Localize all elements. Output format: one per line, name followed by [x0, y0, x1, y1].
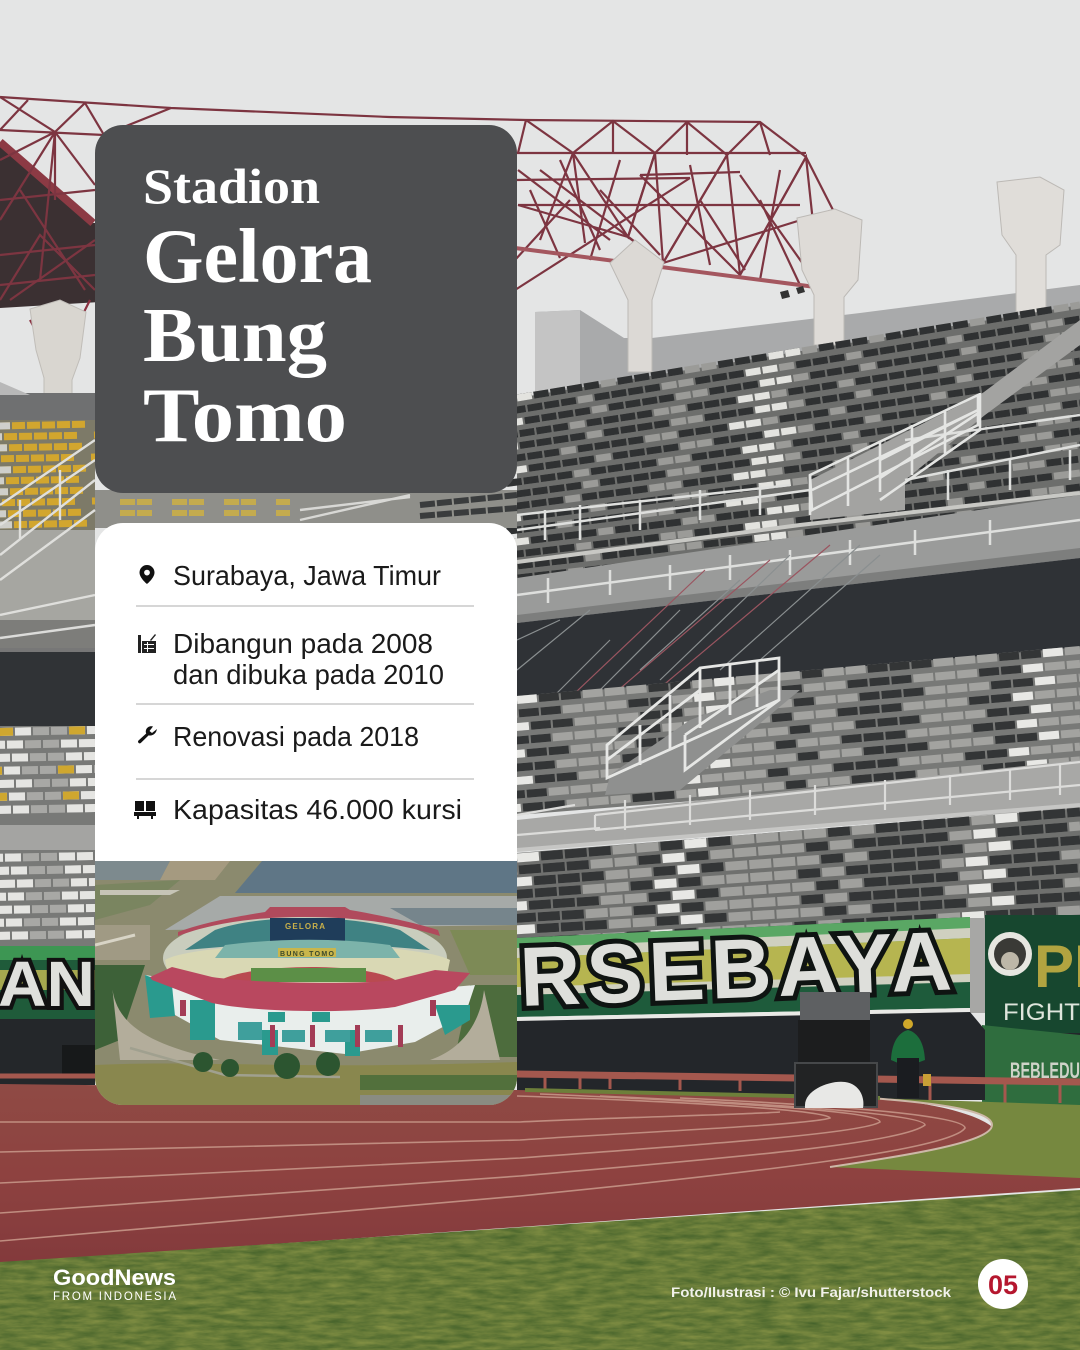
- worker figure: [891, 1019, 931, 1098]
- gap strip between panels: [95, 490, 517, 528]
- track: [0, 1084, 1080, 1263]
- track lanes: [0, 1094, 965, 1241]
- aerial: back roof: [178, 907, 440, 936]
- logo: GoodNews from Indonesia: GoodNews: [53, 1265, 176, 1290]
- banner: Persebaya left: AN: [0, 948, 95, 1020]
- aerial: red track and pitch: [218, 967, 398, 982]
- concourse deck: [517, 495, 1080, 623]
- fact: renovation: Renovasi pada 2018: [173, 721, 419, 752]
- dark wall below banners: [517, 1012, 985, 1100]
- icon: seats: [134, 801, 156, 819]
- aerial: front roof: [150, 967, 470, 1011]
- facts card: [95, 523, 517, 1105]
- speaker stack: [795, 992, 877, 1108]
- icon: wrench: [138, 726, 157, 743]
- aerial: stands: [163, 917, 447, 968]
- title: Gelora Bung Tomo: Gelora: [143, 213, 372, 299]
- roof truss: [0, 97, 833, 420]
- title: Gelora Bung Tomo: [143, 213, 372, 458]
- aerial: water ponds: [95, 861, 170, 880]
- banner: green fighter: [970, 915, 1080, 1105]
- banner: green fighter: FIGHT: [1003, 999, 1080, 1026]
- under-deck dark void: [517, 558, 1080, 700]
- lower stand seats: [483, 647, 1080, 815]
- upper stand seats: [473, 305, 1080, 600]
- fact: capacity: Kapasitas 46.000 kursi: [173, 794, 462, 825]
- third tier seats: [483, 808, 1080, 945]
- roof underside left: [0, 142, 100, 308]
- page number: 05: [988, 1270, 1018, 1300]
- logo: GoodNews from Indonesia: [53, 1265, 176, 1303]
- aerial: stadium name: GELORA: [285, 922, 325, 931]
- title: Gelora Bung Tomo: Tomo: [143, 372, 347, 458]
- left side: gray wall, yellow seats: [0, 393, 95, 420]
- right pillars: [610, 240, 664, 372]
- aerial photo of stadium: BUNG TOMO: [280, 951, 335, 958]
- field grass: [0, 1190, 1080, 1350]
- lower stair rails: [607, 658, 779, 778]
- left pillar: [30, 300, 86, 430]
- aerial: teal and white facade: [145, 975, 475, 1054]
- grass wedge: [830, 1098, 1080, 1178]
- lower aisle and stairs: [605, 690, 800, 795]
- title: Gelora Bung Tomo: Bung: [143, 292, 327, 378]
- fact: built: Dibangun pada 2008: [173, 628, 433, 659]
- photo credit: Foto/Ilustrasi : © Ivu Fajar/shutterstock: [671, 1284, 951, 1300]
- red barrier: [0, 1074, 1080, 1103]
- icon: location pin: [140, 565, 154, 584]
- fact: built: dan dibuka pada 2010: [173, 659, 444, 690]
- dividers: [136, 605, 474, 780]
- title: Stadion: Stadion: [143, 158, 320, 214]
- upper aisle stairs: [810, 320, 1080, 520]
- page number: [978, 1259, 1028, 1309]
- icon: blueprint: [138, 634, 156, 653]
- fact: built: [173, 628, 444, 690]
- back wall: [520, 285, 1080, 420]
- banner: Persebaya right: RSEBAYA: [518, 913, 953, 1024]
- aerial photo of stadium: [95, 861, 517, 1105]
- lower walkway rails: [517, 760, 1080, 850]
- logo: GoodNews from Indonesia: FROM INDONESIA: [53, 1291, 176, 1303]
- title panel: [95, 125, 517, 493]
- fact: location: Surabaya, Jawa Timur: [173, 560, 441, 591]
- upper white stair rails: [810, 393, 980, 515]
